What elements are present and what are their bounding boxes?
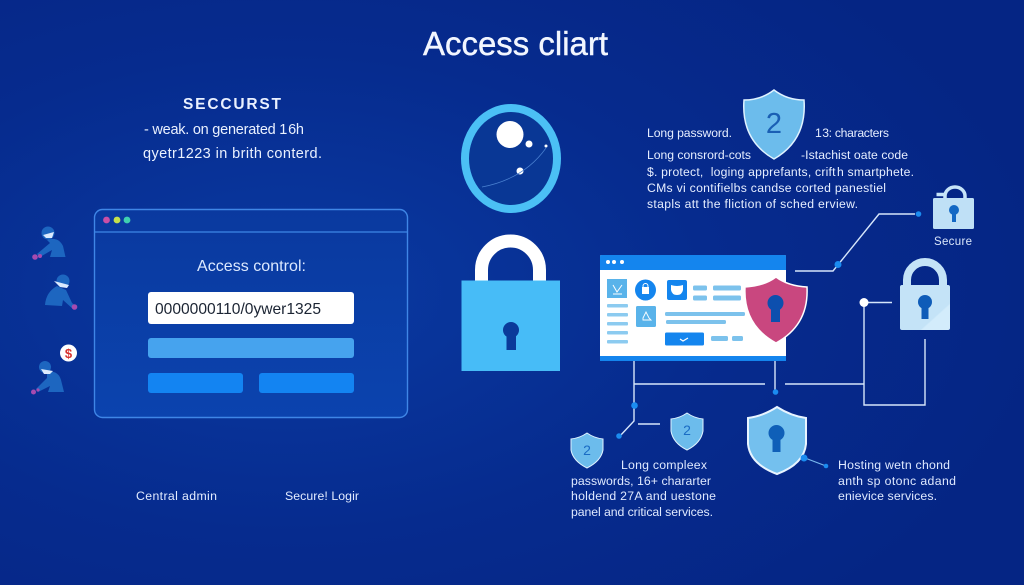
text block: weak password warning: qyetr1223 in brith conterd. bbox=[143, 146, 322, 162]
icon: numbered shield top: 2 bbox=[766, 108, 782, 140]
icon: hacker bottom bbox=[31, 361, 64, 394]
icon: small shield bottom left: 2 bbox=[583, 442, 591, 458]
connector nodes bbox=[616, 298, 868, 439]
password input bbox=[148, 292, 354, 324]
icon: hacker middle bbox=[45, 274, 77, 310]
icon: small secure padlock bbox=[933, 187, 974, 229]
text block: complex passwords: Long compleex bbox=[621, 458, 708, 472]
label: central admin: Central admin bbox=[136, 489, 217, 503]
text block: password guidance: -Istachist oate code bbox=[801, 148, 908, 162]
icon: small shield bottom middle bbox=[671, 413, 703, 450]
button right bbox=[259, 373, 354, 393]
text block: password guidance: Long password. bbox=[647, 126, 732, 140]
icon: hacker top bbox=[32, 226, 66, 260]
icon: pink keyhole shield bbox=[745, 277, 807, 343]
icon: dollar badge bbox=[60, 344, 77, 362]
tile: light icon bbox=[636, 306, 656, 327]
text block: password guidance: Long consrord-cots bbox=[647, 148, 751, 162]
title: Access cliart bbox=[423, 25, 608, 62]
icon: small shield bottom left bbox=[571, 433, 603, 468]
left list lines bbox=[607, 304, 628, 344]
form heading: Access control: bbox=[197, 258, 306, 275]
panel: access control window bbox=[94, 210, 408, 418]
connector: network lines bbox=[619, 302, 925, 437]
icon: numbered shield top bbox=[744, 90, 804, 159]
connector: browser to secure lock bbox=[795, 211, 921, 271]
text block: hosting bbox=[838, 458, 956, 503]
label: secure login: Secure! Logir bbox=[285, 489, 359, 503]
text block: complex passwords: passwords, 16+ chararter bbox=[571, 474, 711, 488]
tile: lock circle bbox=[635, 280, 656, 300]
tile: blue icon bbox=[667, 280, 687, 300]
text block: hosting: anth sp otonc adand bbox=[838, 474, 956, 488]
text block: hosting: Hosting wetn chond bbox=[838, 458, 950, 472]
text block: password guidance: CMs vi contifielbs candse corted panestiel bbox=[647, 181, 886, 195]
panel: browser dashboard card bbox=[600, 255, 807, 361]
icon: dollar badge: $ bbox=[65, 346, 73, 361]
icon: circular orbit badge bbox=[465, 108, 557, 209]
tile: check bbox=[607, 279, 627, 298]
text block: hosting: enievice services. bbox=[838, 489, 937, 503]
text block: weak password warning bbox=[143, 96, 322, 162]
submit bar bbox=[148, 338, 354, 358]
check button bbox=[665, 332, 704, 346]
icon: keyhole shield bottom bbox=[748, 407, 806, 474]
icon: small shield bottom middle: 2 bbox=[683, 422, 691, 438]
text block: password guidance: 1 3: characters bbox=[815, 126, 889, 140]
icon: large padlock bbox=[462, 241, 560, 371]
connector: shield to hosting bbox=[800, 454, 828, 468]
header dots bbox=[606, 260, 624, 264]
text block: password guidance bbox=[647, 126, 914, 211]
text block: weak password warning: SECCURST bbox=[183, 96, 282, 113]
text block: complex passwords: panel and critical services. bbox=[571, 505, 713, 519]
password input: 0000000110/0ywer1325 bbox=[155, 301, 321, 318]
icon: right padlock bbox=[900, 262, 950, 330]
text block: weak password warning: - weak. on generated 1 6h bbox=[144, 122, 304, 138]
text block: password guidance: $. protect, loging apprefants, crift h smartphete. bbox=[647, 165, 914, 179]
content lines bbox=[665, 286, 745, 341]
label: secure: Secure bbox=[934, 236, 972, 248]
window dots bbox=[103, 217, 130, 223]
button left bbox=[148, 373, 243, 393]
panel: hacker figures bbox=[31, 226, 77, 394]
text block: complex passwords bbox=[571, 458, 716, 519]
text block: password guidance: stapls att the fliction of sched erview. bbox=[647, 197, 858, 211]
text block: complex passwords: holdend 27A and uestone bbox=[571, 489, 716, 503]
